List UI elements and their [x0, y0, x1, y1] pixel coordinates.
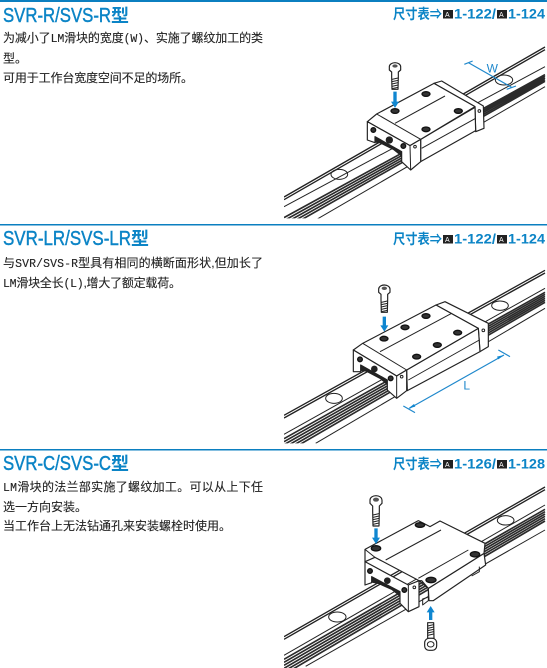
rail	[284, 47, 545, 230]
arrow: downward insertion	[372, 528, 380, 544]
description text: 选一方向安装。	[3, 499, 87, 514]
dimension table reference	[393, 454, 546, 474]
dimension: L: L	[463, 379, 470, 393]
description text	[3, 30, 263, 85]
illustration: LM block with extended length	[284, 270, 545, 454]
heading: SVR-C/SVS-C: 型	[111, 450, 129, 476]
linear block	[367, 81, 484, 170]
dimension table reference: A	[499, 237, 504, 244]
linear block	[353, 302, 488, 398]
dimension table reference: A	[445, 237, 450, 244]
heading: SVR-LR/SVS-LR: SVR-LR/SVS-LR	[3, 228, 131, 250]
dimension table reference: 1-124	[508, 6, 546, 22]
description text: 型。	[3, 52, 27, 66]
rail	[284, 270, 545, 454]
icon: bolt	[379, 285, 390, 312]
description text	[3, 255, 263, 291]
arrow: upward insertion	[427, 606, 435, 620]
description text: LM滑块全长(L),增大了额定载荷。	[3, 275, 181, 291]
dimension table reference: A	[445, 12, 450, 19]
dimension: W: W	[487, 61, 499, 75]
dimension table reference: 尺寸表⇒	[393, 229, 442, 249]
dimension table reference: 尺寸表⇒	[393, 4, 442, 24]
dimension table reference: 1-124	[508, 232, 546, 246]
dimension table reference: A	[499, 462, 504, 469]
illustration: LM block with threaded flange	[284, 487, 545, 668]
description text: 与SVR/SVS-R型具有相同的横断面形状,但加长了	[3, 255, 263, 271]
description text: 可用于工作台宽度空间不足的场所。	[3, 70, 193, 85]
panel: SVR-C/SVS-C type	[0, 449, 547, 668]
dimension table reference: 尺寸表⇒	[393, 454, 442, 474]
description text: 为减小了LM滑块的宽度(W)、实施了螺纹加工的类	[3, 30, 263, 46]
icon: bolt	[389, 63, 401, 89]
heading: SVR-R/SVS-R: 型	[111, 2, 129, 28]
dimension table reference: 1-122/	[454, 6, 496, 22]
heading: SVR-R/SVS-R: SVR-R/SVS-R	[3, 5, 111, 27]
illustration: LM block with narrow width	[284, 47, 545, 230]
panel: SVR-R/SVS-R type	[0, 0, 547, 230]
description text: 当工作台上无法钻通孔来安装螺栓时使用。	[3, 518, 231, 533]
heading: SVR-LR/SVS-LR: 型	[131, 225, 149, 251]
rail	[284, 487, 545, 668]
arrow: bolt insertion	[391, 92, 399, 108]
icon: upper bolt	[370, 496, 382, 526]
dimension table reference: 1-128	[508, 456, 546, 472]
dimension table reference: A	[499, 12, 504, 19]
arrow: bolt insertion	[380, 317, 388, 332]
dimension table reference: A	[445, 462, 450, 469]
dimension: W	[464, 61, 516, 89]
dimension: L	[403, 350, 510, 413]
dimension table reference: 1-126/	[454, 456, 496, 472]
linear block with flange	[365, 521, 486, 612]
description text: LM滑块的法兰部实施了螺纹加工。可以从上下任	[3, 479, 263, 495]
dimension table reference: 1-122/	[454, 232, 496, 246]
description text	[3, 479, 263, 533]
heading: SVR-C/SVS-C: SVR-C/SVS-C	[3, 453, 111, 475]
icon: lower bolt	[425, 623, 437, 650]
dimension table reference	[393, 4, 546, 24]
panel: SVR-LR/SVS-LR type	[0, 224, 547, 454]
dimension table reference	[393, 229, 546, 249]
